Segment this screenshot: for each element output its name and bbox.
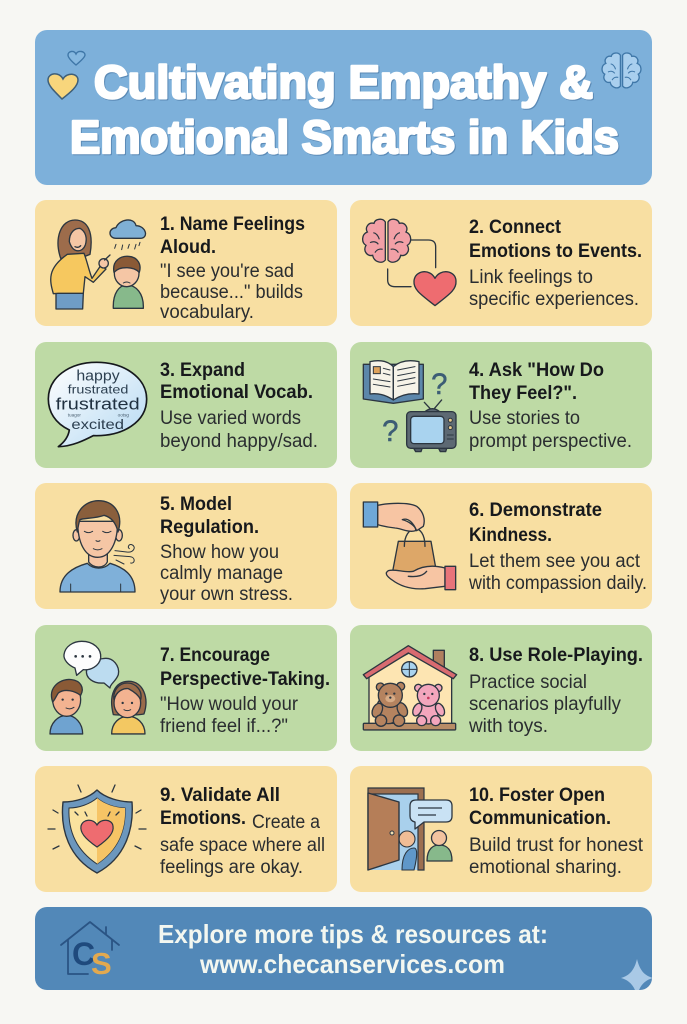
body text: your own stress. <box>160 584 293 605</box>
body text: scenarios playfully <box>469 694 621 715</box>
heading: 8. Use Role-Playing. <box>469 644 643 666</box>
title <box>70 56 619 163</box>
heading: 5. Model <box>160 493 232 515</box>
icon: sparkle <box>621 959 652 990</box>
header banner <box>35 30 652 185</box>
heading <box>160 213 305 258</box>
icon: speech bubble of emotion words: tuagor <box>68 412 81 417</box>
heading: Kindness. <box>469 524 552 546</box>
panel: 7 encourage perspective-taking <box>35 625 337 751</box>
heading: Communication. <box>469 807 611 829</box>
icon: calm person breathing out <box>60 501 135 592</box>
heading <box>160 644 330 690</box>
body text <box>468 551 647 594</box>
body text: with toys. <box>468 716 548 737</box>
icon: open book, television and question marks: ? <box>431 368 447 401</box>
icon: speech bubble of emotion words: frustrated <box>56 394 140 413</box>
body text <box>469 267 639 310</box>
icon: open door with people talking <box>368 788 452 870</box>
panel: 5 model regulation <box>35 483 337 609</box>
heading: 3. Expand <box>160 359 245 381</box>
body text: Link feelings to <box>469 267 593 288</box>
heading: 7. Encourage <box>160 644 270 666</box>
heading <box>469 359 604 404</box>
icon: mother pointing at sad child under rain cloud <box>51 220 145 309</box>
icon: open book, television and question marks: ? <box>382 415 398 448</box>
icon: blue brain <box>602 53 641 88</box>
icon: speech bubble of emotion words <box>48 362 147 447</box>
panel: 9 validate all emotions <box>35 766 337 892</box>
title: Emotional Smarts in Kids <box>70 111 619 163</box>
body text: "How would your <box>160 694 299 715</box>
panel: 6 demonstrate kindness <box>350 483 652 609</box>
panel: 2 connect emotions to events <box>350 200 652 326</box>
heading <box>469 784 611 829</box>
body text <box>469 835 644 878</box>
logo: house with CS monogram <box>61 922 119 981</box>
body text: Let them see you act <box>469 551 641 572</box>
body text: Practice social <box>469 672 587 693</box>
icon: speech bubble of emotion words: happy <box>76 369 120 385</box>
call to action text <box>158 919 548 979</box>
icon: speech bubble of emotion words: excited <box>71 416 124 432</box>
heading: They Feel?". <box>469 382 577 404</box>
icon: hand passing gift bag to open hand <box>363 502 456 590</box>
call to action text: Explore more tips & resources at: <box>158 919 548 949</box>
footer banner <box>35 907 653 996</box>
logo: house with CS monogram: S <box>91 946 112 981</box>
body text: specific experiences. <box>469 289 639 310</box>
body text <box>160 408 318 452</box>
panel: 8 use role-playing <box>350 625 652 751</box>
body text: because..." builds <box>160 282 303 303</box>
body text: prompt perspective. <box>469 431 632 452</box>
heading: Perspective-Taking. <box>160 668 330 690</box>
panel: 1 name feelings aloud <box>35 200 337 326</box>
heading: Emotions. <box>160 807 246 829</box>
call to action text: www.checanservices.com <box>199 949 505 979</box>
heading: 1. Name Feelings <box>160 213 305 235</box>
panel: 10 foster open communication <box>350 766 652 892</box>
panel: 3 expand emotional vocab <box>35 342 337 468</box>
panel: 4 ask how do they feel <box>350 342 652 468</box>
heading: 10. Foster Open <box>469 784 605 806</box>
body text: beyond happy/sad. <box>160 431 318 452</box>
body text <box>468 672 621 737</box>
icon: speech bubble of emotion words: ootsg <box>118 412 129 417</box>
logo: house with CS monogram: C <box>72 936 95 972</box>
body text: Show how you <box>160 542 279 563</box>
heading: 6. Demonstrate <box>469 499 602 521</box>
body text: Use varied words <box>160 408 301 429</box>
body text: with compassion daily. <box>468 573 647 594</box>
body text: vocabulary. <box>160 302 254 323</box>
heading: 4. Ask "How Do <box>469 359 604 381</box>
body text: "I see you're sad <box>160 261 294 282</box>
body text: friend feel if...?" <box>160 716 288 737</box>
heading <box>160 359 313 403</box>
icon: shield with heart <box>48 785 146 873</box>
body text: feelings are okay. <box>160 857 303 878</box>
title: Cultivating Empathy & <box>94 56 593 108</box>
heading: 2. Connect <box>469 216 561 238</box>
body text <box>469 408 632 452</box>
heading <box>469 499 602 546</box>
heading: Aloud. <box>160 236 216 258</box>
icon: two children with speech bubbles <box>50 641 146 734</box>
body text: Build trust for honest <box>469 835 644 856</box>
body text <box>160 812 325 878</box>
heading: Emotional Vocab. <box>160 381 313 403</box>
heading: 9. Validate All <box>160 784 280 806</box>
heading: Regulation. <box>160 516 259 538</box>
body text <box>160 261 303 323</box>
heading <box>160 784 280 829</box>
body text: safe space where all <box>160 835 325 856</box>
heading <box>160 493 259 538</box>
heading: Emotions to Events. <box>469 240 642 262</box>
body text: emotional sharing. <box>469 857 622 878</box>
body text: Use stories to <box>469 408 580 429</box>
icon: speech bubble of emotion words: frustrated <box>68 382 128 396</box>
icon: brain linked to heart <box>363 219 456 306</box>
body text: Create a <box>252 812 320 833</box>
icon: yellow heart <box>48 74 78 99</box>
body text <box>160 542 293 605</box>
body text: calmly manage <box>160 563 283 584</box>
heading <box>469 216 642 262</box>
icon: toy house with teddy bears <box>363 646 457 730</box>
body text <box>160 694 299 737</box>
icon: outlined blue heart <box>68 51 85 65</box>
icon: open book, television and question marks <box>363 361 456 452</box>
